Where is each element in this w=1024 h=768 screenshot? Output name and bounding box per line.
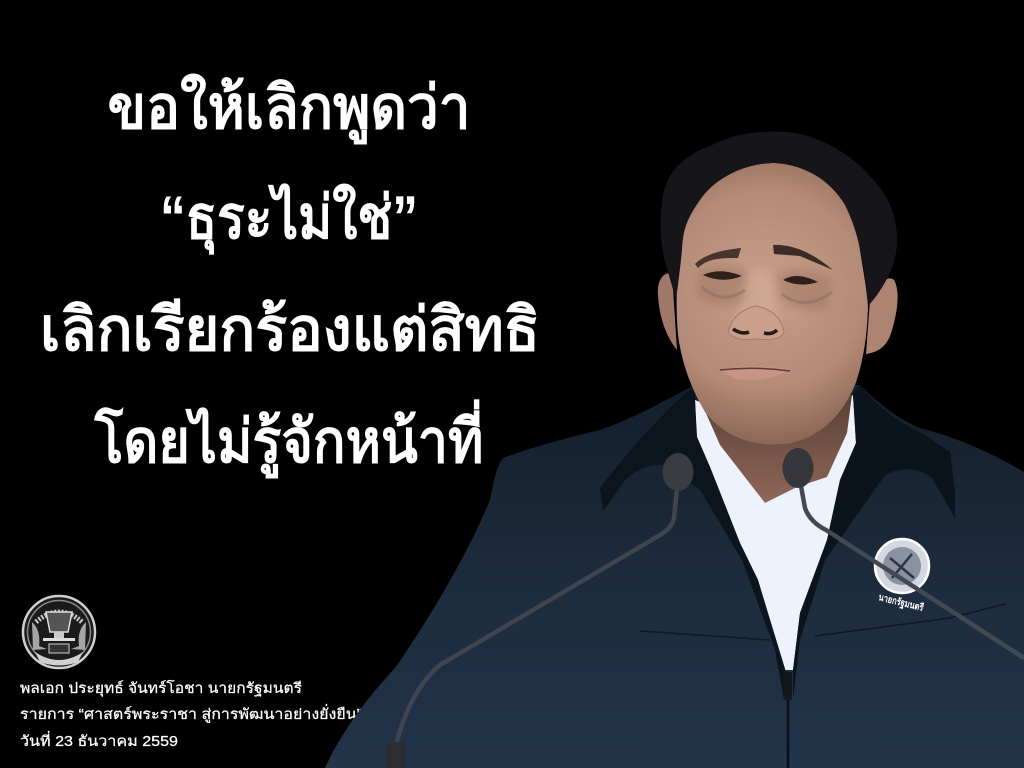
face [677, 163, 868, 445]
zipper [787, 672, 789, 768]
right ear [866, 278, 898, 354]
right microphone [782, 448, 1024, 658]
source caption [20, 679, 362, 750]
hair [661, 131, 897, 306]
headline quote: โดยไม่รู้จักหน้าที่ [94, 399, 484, 479]
jacket yoke seam [640, 604, 1005, 640]
eye socket shading [697, 265, 833, 310]
icon: government seal [23, 596, 95, 668]
right jacket collar [793, 385, 955, 700]
headline quote: “ธุระไม่ใช่” [160, 182, 418, 255]
mouth [720, 366, 790, 380]
portrait of speaker [325, 131, 1024, 768]
headline quote: ขอให้เลิกพูดว่า [108, 73, 470, 145]
nose highlight [735, 270, 780, 325]
right eyebrow [773, 245, 833, 270]
left eye [703, 271, 742, 280]
headline quote [40, 73, 540, 479]
source caption: วันที่ 23 ธันวาคม 2559 [20, 731, 178, 750]
left eyebrow [695, 248, 741, 268]
shirt [695, 395, 856, 670]
jacket emblem: นายกรัฐมนตรี [877, 591, 925, 614]
nose [728, 306, 784, 340]
neck [698, 395, 852, 503]
right eye [783, 276, 818, 285]
jacket emblem [875, 539, 929, 614]
left microphone [386, 453, 694, 768]
eye bags [702, 287, 832, 303]
left jacket collar [600, 385, 786, 700]
source caption: พลเอก ประยุทธ์ จันทร์โอชา นายกรัฐมนตรี [20, 679, 302, 697]
source caption: รายการ “ศาสตร์พระราชา สู่การพัฒนาอย่างยั่งยืน” [20, 704, 362, 723]
nostrils [733, 329, 777, 334]
jacket body [325, 385, 1024, 768]
left ear [658, 273, 677, 350]
headline quote: เลิกเรียกร้องแต่สิทธิ [40, 296, 540, 363]
